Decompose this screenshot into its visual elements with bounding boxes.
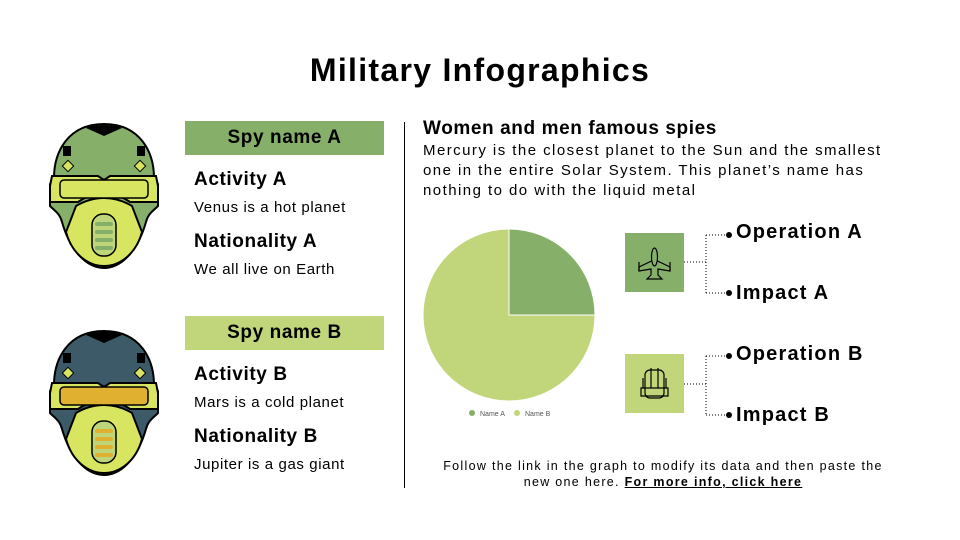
activity A [194, 169, 346, 216]
activity B: Activity B [194, 364, 288, 385]
footer note: new one here. For more info, click here [524, 475, 802, 489]
impact B: Impact B [736, 404, 830, 426]
footer note: Follow the link in the graph to modify its data and then paste the [443, 459, 883, 473]
heading: women and men famous spies: Women and men famous spies [423, 118, 717, 139]
activity B [194, 364, 344, 411]
nationality A [194, 231, 335, 278]
pie chart [424, 230, 594, 418]
spy name B label: Spy name B [227, 322, 342, 343]
icon: backpack box [625, 354, 684, 413]
icon: helmet A [49, 123, 159, 269]
spy name A label: Spy name A [227, 127, 342, 148]
description text: nothing to do with the liquid metal [423, 182, 696, 199]
description text: Mercury is the closest planet to the Sun and the smallest [423, 142, 882, 159]
icon: helmet B [49, 330, 159, 476]
nationality A: We all live on Earth [194, 261, 335, 278]
activity B: Mars is a cold planet [194, 394, 344, 411]
footer note [443, 459, 883, 489]
operation A: Operation A [736, 221, 863, 243]
activity A: Activity A [194, 169, 287, 190]
nationality B [194, 426, 345, 473]
connector B [684, 353, 732, 418]
description text [423, 142, 882, 199]
operation B: Operation B [736, 343, 864, 365]
nationality B: Jupiter is a gas giant [194, 456, 345, 473]
description text: one in the entire Solar System. This planet’s name has [423, 162, 864, 179]
nationality B: Nationality B [194, 426, 318, 447]
spy name B label [185, 316, 384, 350]
impact A: Impact A [736, 282, 829, 304]
activity A: Venus is a hot planet [194, 199, 346, 216]
icon: jet box [625, 233, 684, 292]
title: Military Infographics [310, 52, 650, 88]
pie chart: Name B [525, 411, 551, 418]
connector A [684, 232, 732, 296]
nationality A: Nationality A [194, 231, 317, 252]
pie chart: Name A [480, 411, 505, 418]
spy name A label [185, 121, 384, 155]
